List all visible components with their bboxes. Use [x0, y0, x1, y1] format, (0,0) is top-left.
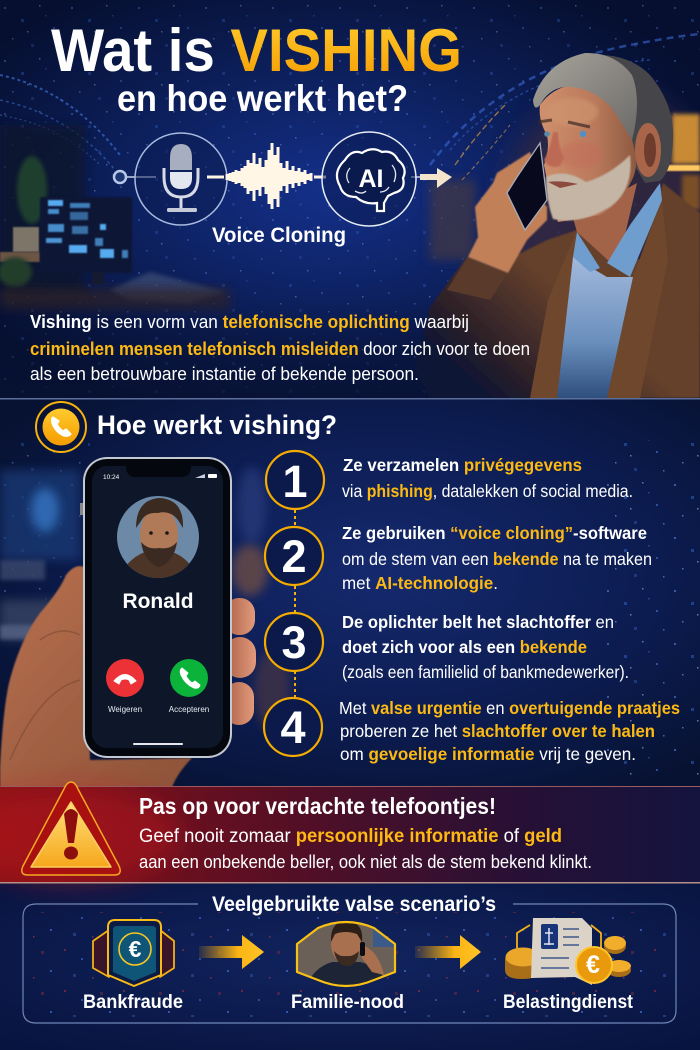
step 2: 2 — [281, 531, 307, 582]
step 3 text: De oplichter belt het slachtoffer en — [342, 612, 614, 632]
step 3 text: (zoals een familielid of bankmedewerker). — [342, 662, 629, 682]
hand holding phone (back) — [0, 566, 256, 787]
step 2 text — [342, 523, 652, 593]
step 1 — [266, 451, 324, 509]
step 2 — [265, 527, 323, 585]
icon: bank fraud shield: € — [129, 936, 142, 962]
small coins — [604, 938, 626, 954]
step 3 — [265, 613, 323, 671]
step 1: 1 — [282, 456, 308, 507]
cuff — [447, 257, 508, 300]
title: en hoe werkt het? — [117, 78, 408, 119]
ear — [635, 123, 661, 177]
step 4 text: Met valse urgentie en overtuigende praatjes — [339, 698, 680, 718]
step 2 text: met AI-technologie. — [342, 573, 498, 593]
step 4 — [264, 698, 322, 756]
accept button — [169, 659, 209, 714]
man on the phone — [415, 53, 700, 398]
step 4: 4 — [280, 702, 306, 753]
background: bottom section — [0, 883, 700, 1050]
step numbers — [264, 451, 324, 756]
arrow — [420, 168, 452, 188]
step 2 text: Ze gebruiken “voice cloning”-software — [342, 523, 647, 543]
background: how it works section — [0, 398, 700, 788]
intro text: als een betrouwbare instantie of bekende persoon. — [30, 364, 419, 384]
label: Voice Cloning — [212, 224, 346, 247]
step 2 text: om de stem van een bekende na te maken — [342, 549, 652, 569]
step 4 text — [339, 698, 680, 764]
phone — [507, 143, 547, 230]
step 3: 3 — [281, 617, 307, 668]
arrow 2 — [415, 935, 481, 969]
decline button: Weigeren — [108, 705, 142, 714]
panel: false scenarios — [23, 893, 676, 1023]
decline button — [106, 659, 144, 714]
icon: AI brain: AI — [358, 165, 384, 193]
intro text: Vishing is een vorm van telefonische oplichting waarbij — [30, 312, 469, 332]
labels: Belastingdienst — [503, 992, 634, 1013]
step 1 text: via phishing, datalekken of social media. — [342, 481, 633, 501]
icon: AI brain — [322, 132, 416, 226]
eyes and brows — [538, 120, 590, 127]
icon: tax office document and coins: € — [586, 951, 600, 979]
step 4 text: proberen ze het slachtoffer over te halen — [340, 721, 655, 741]
cardigan — [415, 183, 700, 398]
hair front — [533, 53, 637, 140]
neck — [573, 183, 637, 262]
step 4 text: om gevoelige informatie vrij te geven. — [340, 744, 636, 764]
section heading: how it works — [36, 402, 337, 452]
arrow 1 — [199, 935, 264, 969]
intro text — [30, 312, 530, 384]
node — [114, 171, 126, 183]
document — [531, 918, 592, 985]
title — [51, 17, 462, 119]
collar — [573, 183, 662, 277]
title: Wat is VISHING — [51, 17, 462, 84]
icon: bank fraud shield — [93, 920, 174, 986]
intro text: criminelen mensen telefonisch misleiden door zich voor te doen — [30, 339, 530, 359]
beard — [546, 155, 631, 220]
smartphone: 10:24 — [103, 474, 120, 481]
warning band: aan een onbekende beller, ook niet als de stem bekend klinkt. — [139, 852, 592, 872]
icon: phone badge — [36, 402, 86, 452]
labels: Familie-nood — [291, 992, 404, 1013]
heading: Veelgebruikte valse scenario’s — [212, 893, 496, 916]
warning band: Geef nooit zomaar persoonlijke informatie of geld — [139, 826, 562, 847]
euro coin — [576, 947, 612, 983]
step 3 text: doet zich voor als een bekende — [342, 637, 587, 657]
face — [540, 85, 636, 222]
icon: microphone — [135, 133, 227, 225]
shirt — [557, 257, 633, 398]
icon: tax office document and coins — [505, 918, 631, 985]
hand — [468, 152, 547, 273]
smartphone: Ronald — [122, 590, 194, 613]
section heading: how it works: Hoe werkt vishing? — [97, 410, 337, 440]
warning band: Pas op voor verdachte telefoontjes! — [139, 793, 496, 819]
accept button: Accepteren — [169, 705, 209, 714]
warning band — [0, 782, 700, 884]
caller avatar — [117, 496, 199, 580]
voice cloning diagram — [114, 132, 452, 247]
labels: Bankfraude — [83, 992, 183, 1013]
background: top section — [0, 0, 700, 398]
icon: warning triangle — [22, 782, 120, 875]
step 1 text: Ze verzamelen privégegevens — [343, 455, 582, 475]
icon: family emergency portrait — [296, 921, 396, 990]
step 3 text — [342, 612, 629, 682]
background scene: desk with monitor — [0, 125, 440, 398]
coin stack left — [505, 958, 540, 979]
hair back — [565, 55, 673, 183]
smartphone — [80, 457, 232, 758]
waveform — [207, 143, 326, 209]
step 1 text — [342, 455, 633, 501]
labels — [83, 992, 634, 1013]
